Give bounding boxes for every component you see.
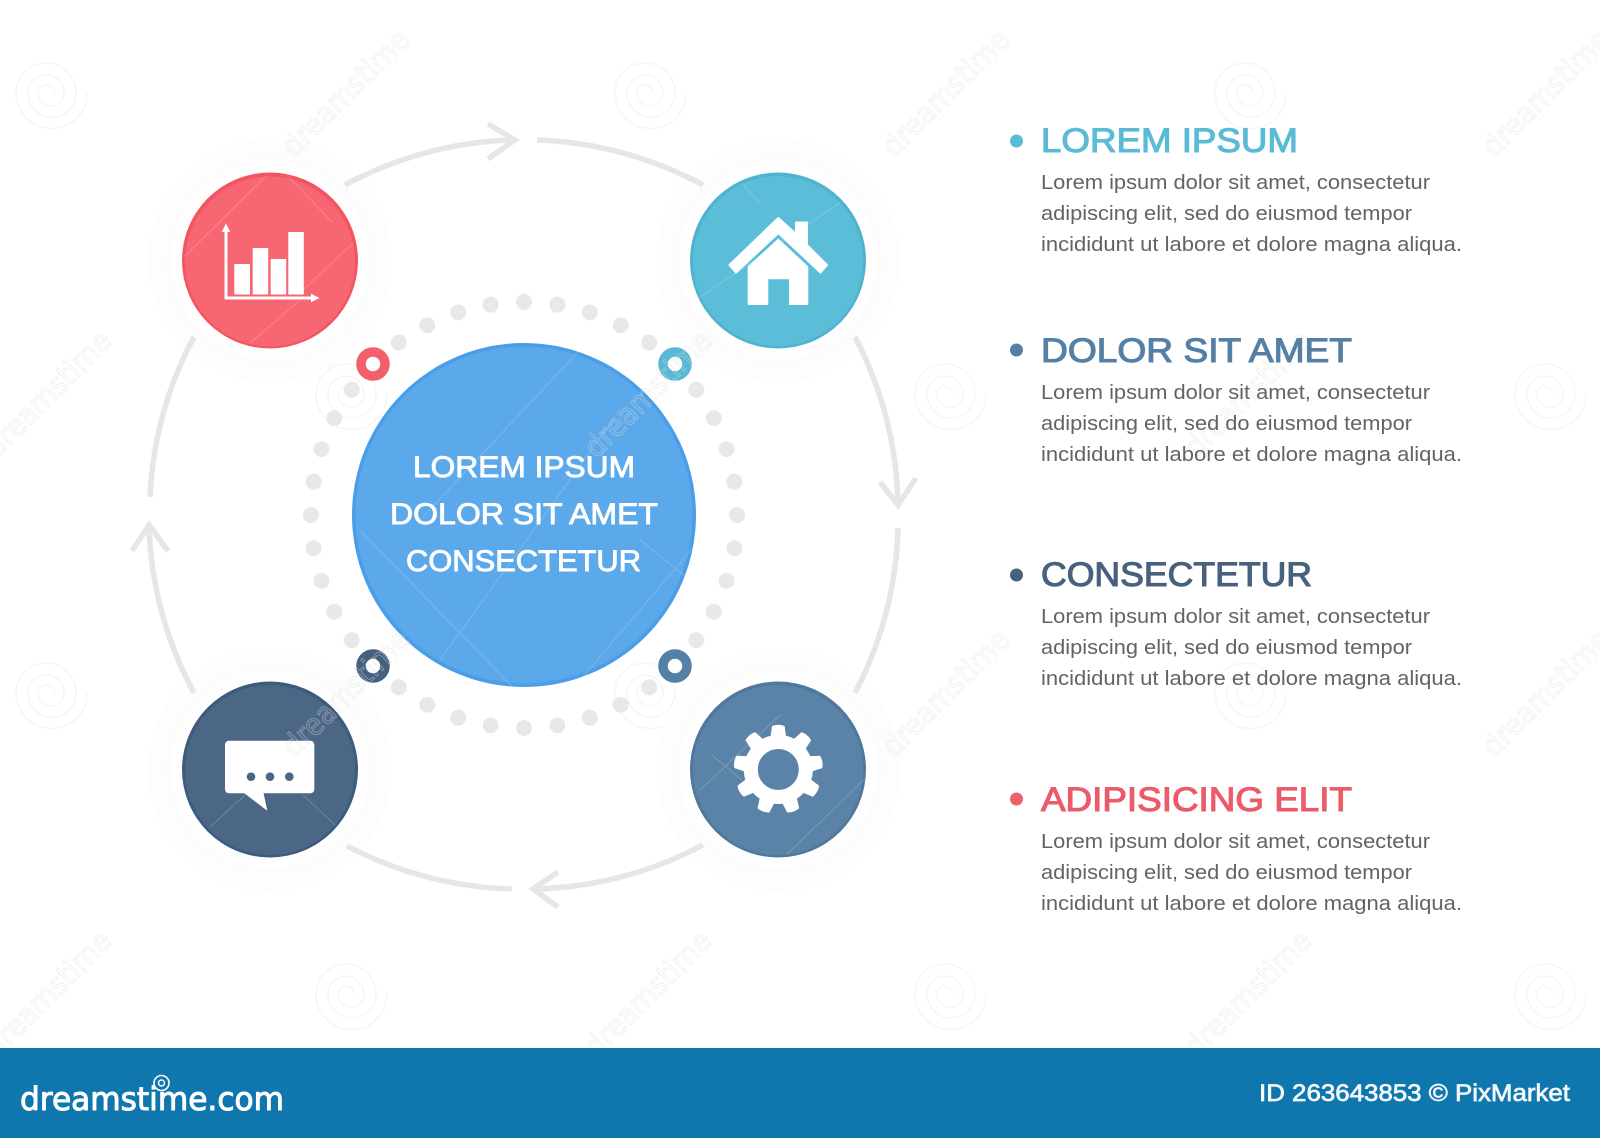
ring marker: teal — [663, 352, 687, 376]
watermark: diagonal dreamstime text: dreamstime — [578, 324, 719, 465]
body text: adipiscing elit, sed do eiusmod tempor — [1041, 636, 1412, 659]
body text: incididunt ut labore et dolore magna aliqua. — [1041, 233, 1462, 256]
dotted ring — [303, 294, 745, 736]
icon: bar chart — [222, 224, 320, 302]
watermark: diagonal dreamstime text: dreamstime — [876, 623, 1017, 764]
arc: bottom left — [347, 846, 512, 889]
body text: adipiscing elit, sed do eiusmod tempor — [1041, 412, 1412, 435]
heading: ADIPISICING ELIT — [1041, 781, 1352, 819]
ring marker: red — [361, 352, 385, 376]
arrow: top left — [345, 124, 515, 185]
watermark: diagonal dreamstime text: dreamstime — [578, 924, 719, 1065]
arc: right lower — [855, 528, 898, 693]
bullet — [1010, 792, 1023, 806]
body text — [1041, 381, 1462, 466]
centre text: DOLOR SIT AMET — [390, 498, 658, 531]
centre text: CONSECTETUR — [406, 545, 641, 578]
node: steel blue gear — [673, 664, 883, 874]
body text: adipiscing elit, sed do eiusmod tempor — [1041, 861, 1412, 884]
arrow: left lower — [132, 525, 194, 693]
body text: Lorem ipsum dolor sit amet, consectetur — [1041, 605, 1430, 628]
bullet — [1010, 568, 1023, 582]
body text: incididunt ut labore et dolore magna aliqua. — [1041, 667, 1462, 690]
body text — [1041, 171, 1462, 256]
heading: CONSECTETUR — [1041, 556, 1312, 594]
body text: Lorem ipsum dolor sit amet, consectetur — [1041, 171, 1430, 194]
list item: Dolor Sit Amet — [1010, 332, 1462, 466]
body text — [1041, 605, 1462, 690]
watermark: diagonal dreamstime text: dreamstime — [876, 23, 1017, 164]
heading: DOLOR SIT AMET — [1041, 332, 1352, 370]
arrow: bottom right — [533, 845, 703, 907]
body text: incididunt ut labore et dolore magna aliqua. — [1041, 892, 1462, 915]
node: navy speech — [165, 664, 375, 874]
ring marker: steel blue — [663, 654, 687, 678]
watermark: diagonal dreamstime text: dreamstime — [276, 23, 417, 164]
watermark: diagonal dreamstime text: dreamstime — [1178, 924, 1319, 1065]
centre circle — [352, 343, 696, 687]
body text: adipiscing elit, sed do eiusmod tempor — [1041, 202, 1412, 225]
bullet — [1010, 134, 1023, 148]
watermark: diagonal dreamstime text: dreamstime — [1178, 324, 1319, 465]
arrow: right upper — [855, 337, 916, 505]
icon: gear — [733, 725, 824, 814]
footer logo: dreamstime.com — [20, 1080, 284, 1118]
icon: speech bubble — [225, 741, 314, 811]
heading: LOREM IPSUM — [1041, 122, 1298, 160]
node halos — [148, 138, 900, 892]
body text: Lorem ipsum dolor sit amet, consectetur — [1041, 381, 1430, 404]
list item: Adipisicing Elit — [1010, 781, 1462, 915]
node: red chart — [165, 156, 375, 366]
ring marker: navy — [361, 654, 385, 678]
body text: incididunt ut labore et dolore magna aliqua. — [1041, 443, 1462, 466]
watermark: diagonal dreamstime text: dreamstime — [276, 623, 417, 764]
footer bar — [0, 1048, 1600, 1138]
body text — [1041, 830, 1462, 915]
centre text — [390, 451, 658, 578]
node: teal home — [673, 156, 883, 366]
arc: top right — [537, 140, 703, 185]
body text: Lorem ipsum dolor sit amet, consectetur — [1041, 830, 1430, 853]
icon: house — [730, 218, 827, 305]
cycle ring with arrows — [132, 124, 916, 907]
arc: left upper — [150, 337, 194, 497]
footer credit: ID 263643853 © PixMarket — [1259, 1080, 1570, 1107]
centre text: LOREM IPSUM — [413, 451, 635, 484]
bullet — [1010, 344, 1023, 356]
list item: Lorem Ipsum — [1010, 122, 1462, 256]
list item: Consectetur — [1010, 556, 1462, 690]
